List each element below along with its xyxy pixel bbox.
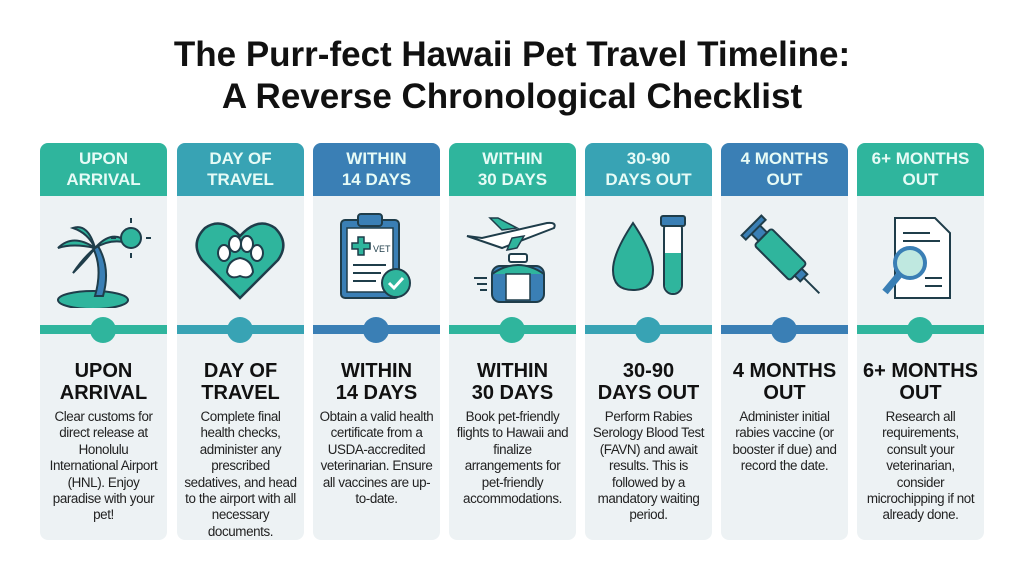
panel: upon arrival: ARRIVAL <box>66 170 141 189</box>
panel: upon arrival: UPON <box>75 360 132 382</box>
panel: within 14 days: 14 DAYS <box>342 170 411 189</box>
icon: vet clipboard: VET <box>373 244 391 254</box>
panel: 6+ months out: 6+ MONTHS <box>863 360 978 382</box>
panel: 6+ months out <box>857 143 984 540</box>
panel: within 14 days <box>313 143 440 540</box>
icon: document magnifier <box>882 217 951 299</box>
panel: 4 months out <box>721 143 848 540</box>
panel: upon arrival: Clear customs for direct release at Honolulu International Airport (HNL). Enjoy paradise with your pet! <box>50 409 157 522</box>
panel: within 14 days: Obtain a valid health certificate from a USDA-accredited veterinarian. Ensure all vaccines are up-to-date. <box>320 409 433 506</box>
panel: day of travel: Complete final health checks, administer any prescribed sedatives, and head to the airport with all necessary documents. <box>184 409 297 539</box>
panel: 6+ months out: OUT <box>899 382 942 404</box>
panel: within 14 days: WITHIN <box>346 149 407 168</box>
panel: 4 months out: OUT <box>763 382 806 404</box>
panel: 6+ months out: Research all requirements, consult your veterinarian, consider microchipping if not already done. <box>867 409 974 522</box>
icon: plane and carrier <box>466 217 556 303</box>
panel: within 14 days: WITHIN <box>341 360 412 382</box>
title: A Reverse Chronological Checklist <box>222 77 802 116</box>
panel: 30-90 days out: 30-90 <box>627 149 670 168</box>
panel: 4 months out: 4 MONTHS <box>741 149 828 168</box>
panel: within 30 days: Book pet-friendly flights to Hawaii and finalize arrangements for pet-friendly accommodations. <box>457 409 568 506</box>
panel: day of travel: DAY OF <box>209 149 272 168</box>
icon: heart paw <box>195 222 285 300</box>
panel: within 30 days <box>449 143 576 540</box>
panel: 30-90 days out: 30-90 <box>623 360 674 382</box>
panel: within 14 days: 14 DAYS <box>336 382 417 404</box>
panel: 30-90 days out <box>585 143 712 540</box>
panel: 6+ months out: 6+ MONTHS <box>872 149 969 168</box>
panel: 4 months out: Administer initial rabies vaccine (or booster if due) and record the date. <box>732 409 837 473</box>
panel: 6+ months out: OUT <box>903 170 938 189</box>
panel: upon arrival: UPON <box>79 149 128 168</box>
panel: within 30 days: 30 DAYS <box>472 382 553 404</box>
panel: day of travel: TRAVEL <box>201 382 280 404</box>
icon: blood drop and tube <box>612 215 686 295</box>
panel: within 30 days: WITHIN <box>477 360 548 382</box>
panel: 30-90 days out: Perform Rabies Serology Blood Test (FAVN) and await results. This is followed by a mandatory waiting period. <box>593 409 704 522</box>
title: The Purr-fect Hawaii Pet Travel Timeline: <box>174 35 850 74</box>
panel: 4 months out: 4 MONTHS <box>733 360 836 382</box>
panel: day of travel: DAY OF <box>204 360 277 382</box>
title <box>174 35 850 116</box>
panel: upon arrival: ARRIVAL <box>60 382 147 404</box>
panel: 30-90 days out: DAYS OUT <box>598 382 699 404</box>
panel: day of travel: TRAVEL <box>207 170 274 189</box>
icon: syringe <box>740 214 820 294</box>
panel: upon arrival <box>40 143 167 540</box>
panel: within 30 days: 30 DAYS <box>478 170 547 189</box>
icon: palm tree <box>57 218 151 308</box>
panel: within 30 days: WITHIN <box>482 149 543 168</box>
panel: 4 months out: OUT <box>767 170 802 189</box>
icon: vet clipboard <box>340 213 411 299</box>
panel: day of travel <box>177 143 304 540</box>
panel: 30-90 days out: DAYS OUT <box>605 170 692 189</box>
